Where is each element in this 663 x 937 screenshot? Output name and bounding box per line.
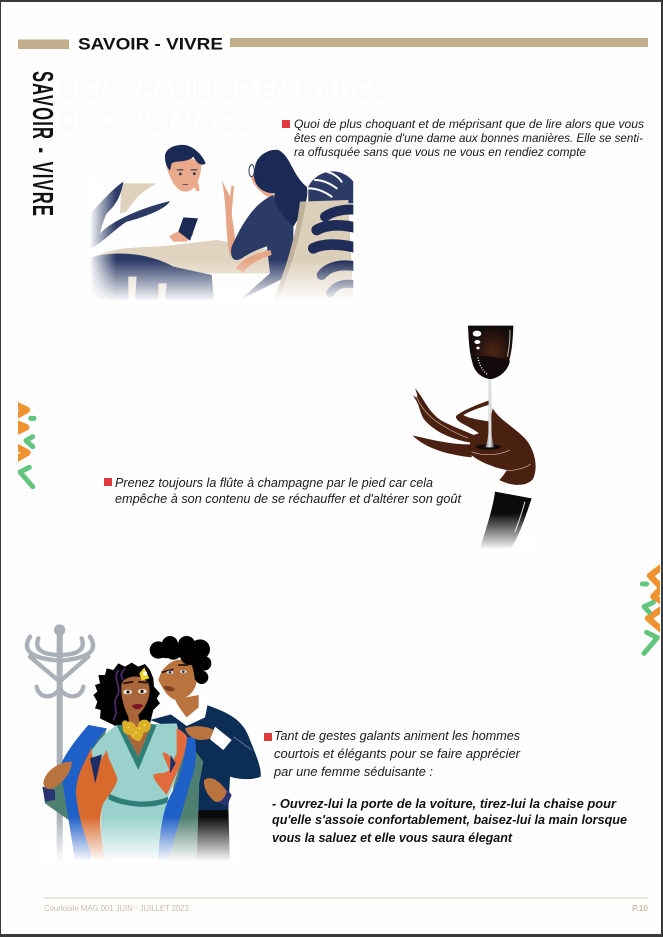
text block: reading in company: êtes en compagnie d'une dame aux bonnes manières. Elle se senti- [294, 131, 643, 145]
header band [18, 36, 648, 54]
text block: champagne flute: empêche à son contenu de se réchauffer et d'altérer son goût [115, 492, 462, 506]
ghost heading [60, 76, 386, 136]
text block: gallant gestures: par une femme séduisante : [273, 765, 433, 779]
text block: bold advice [272, 797, 627, 845]
text block: gallant gestures: courtois et élégants pour se faire apprécier [274, 747, 521, 761]
text block: gallant gestures [264, 729, 521, 779]
heading: section title: SAVOIR - VIVRE [78, 36, 223, 54]
text block: reading in company: Quoi de plus choquant et de méprisant que de lire alors que vous [294, 117, 644, 131]
text block: bold advice: qu'elle s'assoie confortablement, baisez-lui la main lorsque [272, 813, 627, 827]
illustration: couple at restaurant table [89, 145, 367, 302]
bullet [104, 478, 112, 486]
text block: bold advice: vous la saluez et elle vous saura élegant [272, 831, 513, 845]
bullet [282, 120, 290, 128]
decoration: right zigzag [642, 564, 663, 653]
page number: P.10 [632, 904, 649, 913]
text block: gallant gestures: Tant de gestes galants animent les hommes [274, 729, 520, 743]
text block: champagne flute: Prenez toujours la flûte à champagne par le pied car cela [115, 476, 433, 490]
footer [44, 898, 649, 913]
decoration: left zigzag [13, 403, 34, 487]
text block: bold advice: - Ouvrez-lui la porte de la voiture, tirez-lui la chaise pour [272, 797, 617, 811]
ghost heading: CIRCONSTANCES [60, 108, 251, 136]
footer credit: Courtoisie MAG 001 JUIN - JUILLET 2023. [44, 904, 191, 913]
ghost heading: BIEN S'HABILLER EN TOUTES [60, 76, 386, 104]
illustration: couple and coat rack [27, 624, 261, 868]
bullet [264, 733, 272, 741]
vertical section title: SAVOIR - VIVRE [26, 71, 58, 217]
illustration: hand holding wine glass [412, 326, 537, 550]
text block: reading in company: ra offusquée sans que vous ne vous en rendiez compte [294, 145, 586, 159]
text block: champagne flute [104, 476, 462, 506]
text block: reading in company [282, 117, 644, 159]
